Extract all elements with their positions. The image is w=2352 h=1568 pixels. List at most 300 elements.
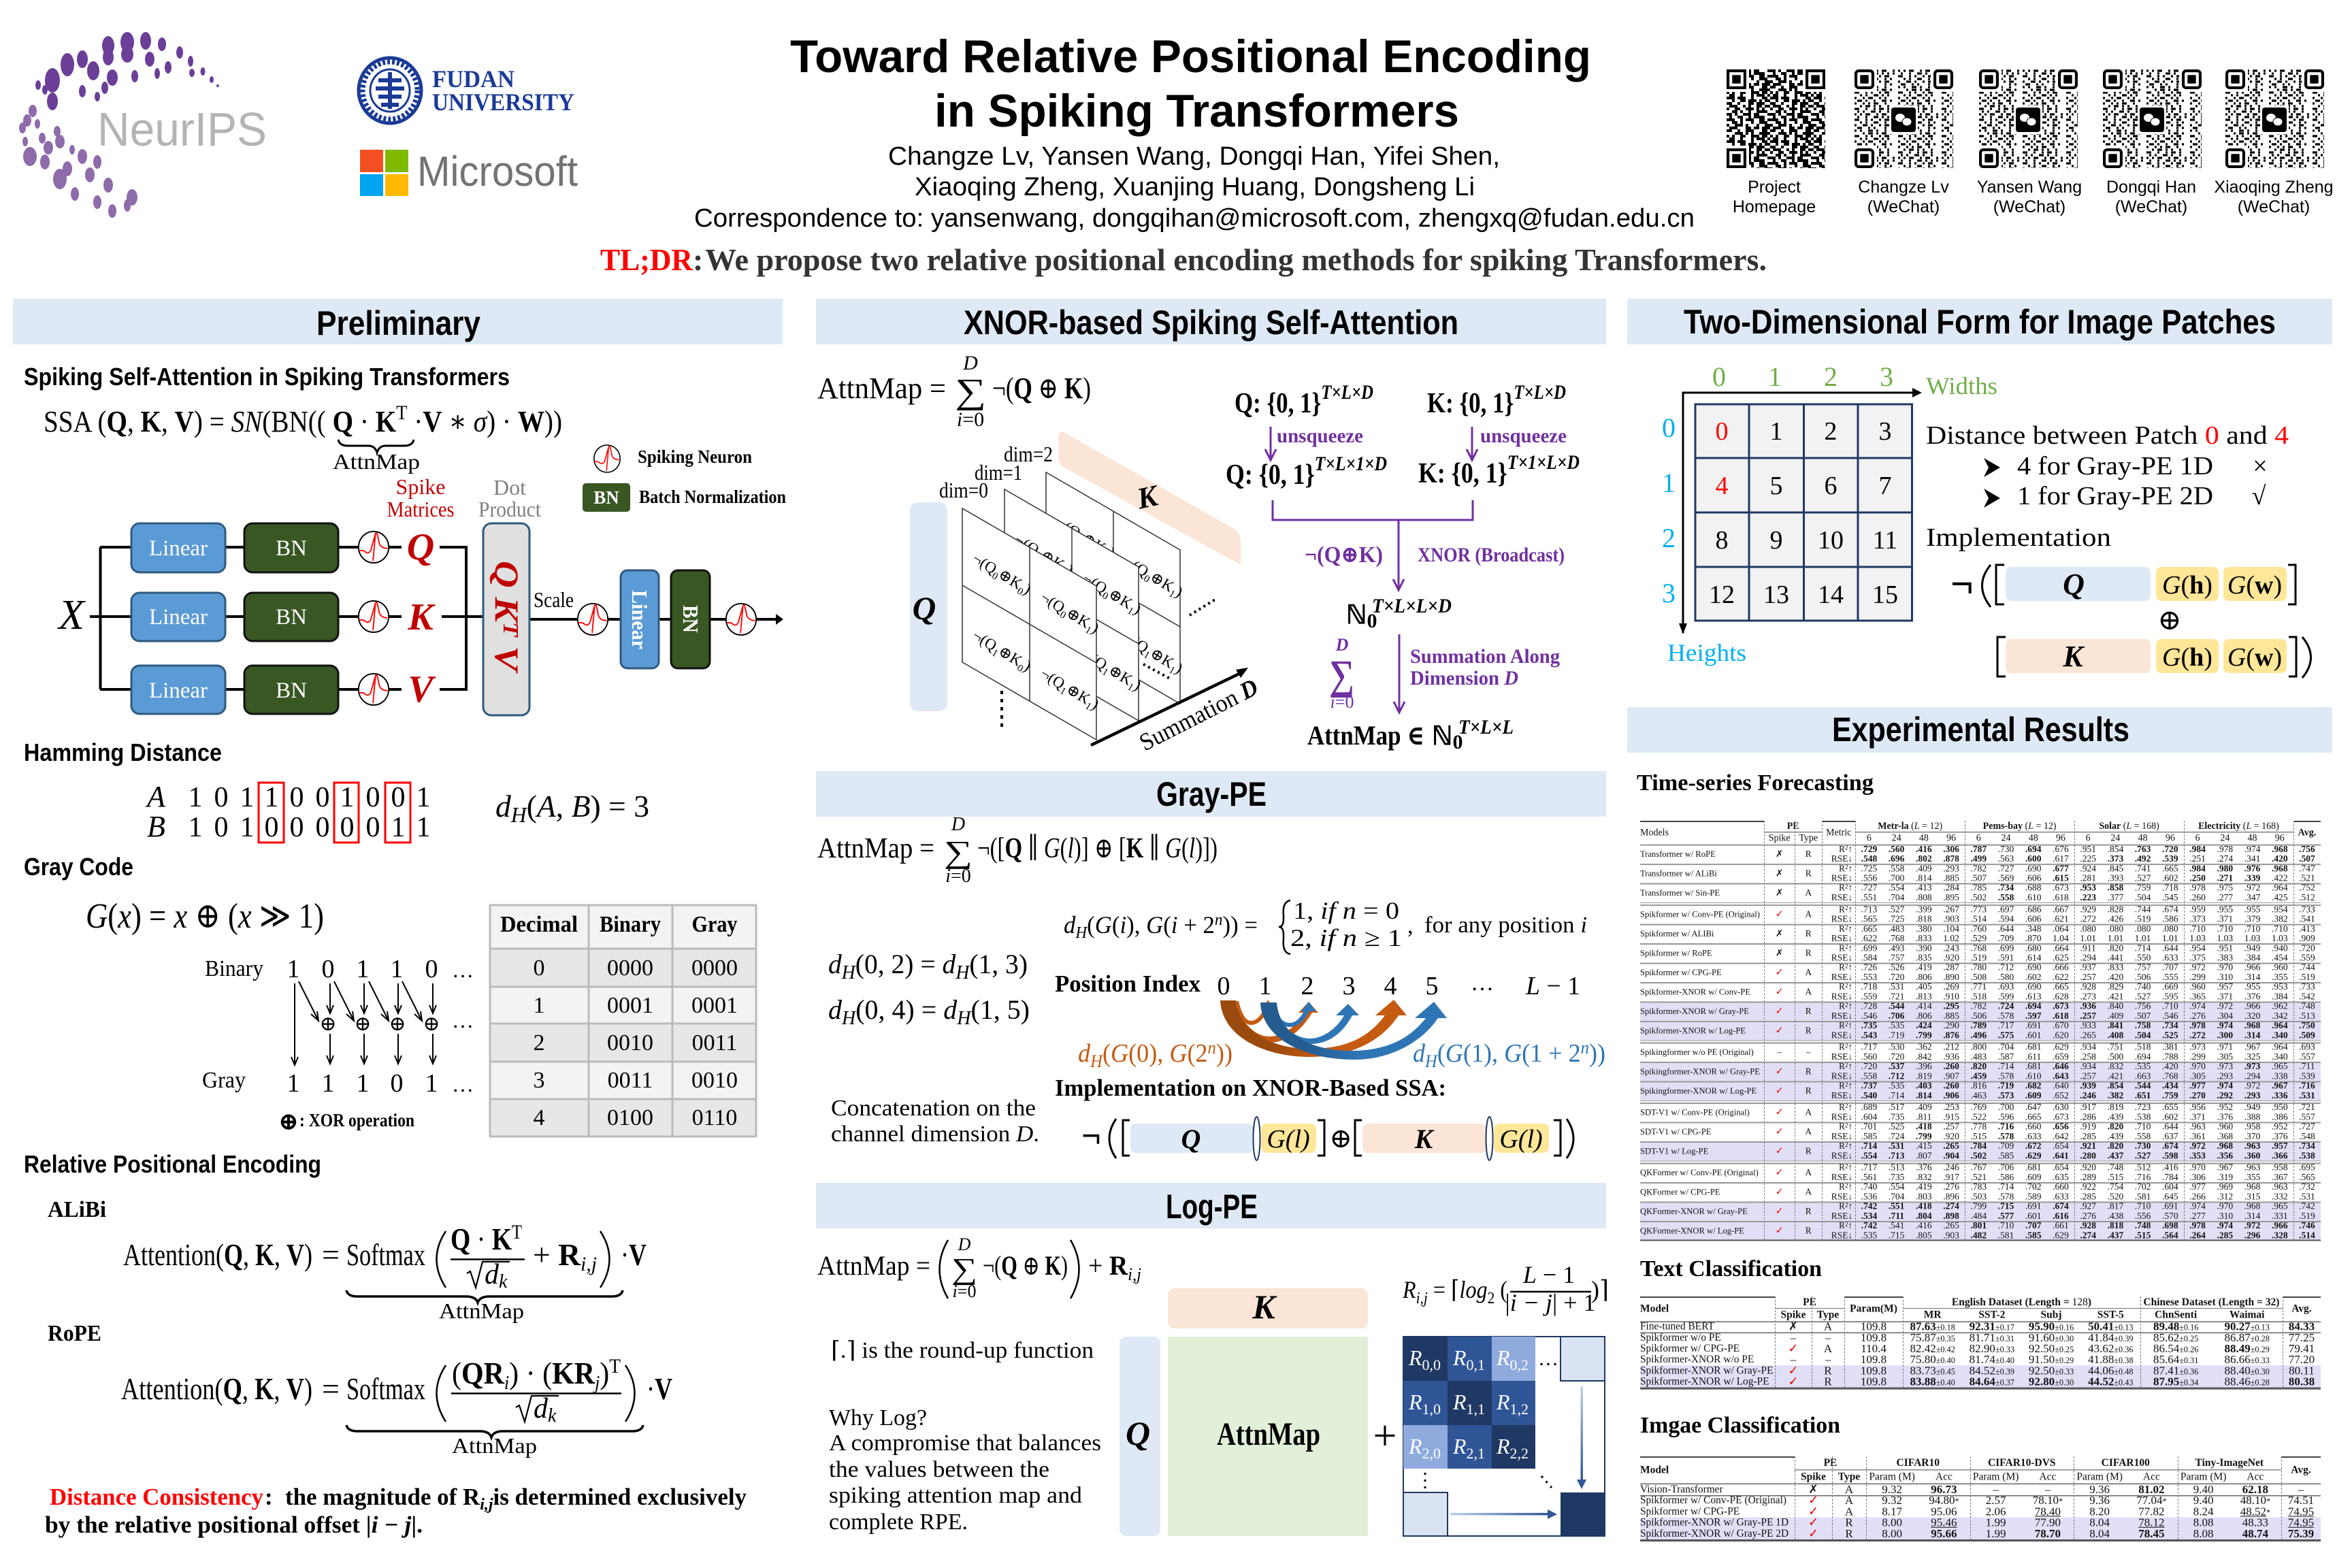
table: time-series forecasting results: .361 (2189, 1131, 2206, 1141)
table: time-series forecasting results: .735 (1889, 1111, 1904, 1122)
table: time-series forecasting results: ✓ (1776, 986, 1784, 997)
table: time-series forecasting results: .424 (1916, 1020, 1932, 1030)
formula: R i j definition: i,j (1416, 1290, 1428, 1307)
table: time-series forecasting results: R2↑ (1839, 962, 1852, 973)
table: time-series forecasting results: .710 (2189, 924, 2206, 934)
table: time-series forecasting results: .519 (2299, 972, 2315, 982)
table: time-series forecasting results: R (1806, 1025, 1812, 1035)
Hamming distance example: 1 (240, 812, 255, 843)
table: time-series forecasting results: .304 (2217, 1011, 2233, 1021)
formula: Hamming distance of Gray code: G(i), G(i + 2 (1095, 911, 1216, 938)
table: time-series forecasting results: .420 (2162, 1061, 2178, 1071)
text: patch distance: √ (2252, 482, 2266, 510)
table: time-series forecasting results: .697 (1998, 904, 2014, 914)
table: time-series forecasting results: .299 (2189, 1051, 2206, 1062)
table: time-series forecasting results: R2↑ (1839, 943, 1852, 953)
table: time-series forecasting results: R (1806, 1066, 1812, 1076)
table: image classification results: ✓ (1808, 1504, 1818, 1519)
formula: ALiBi attention: k (499, 1271, 508, 1292)
table: time-series forecasting results: .531 (2299, 1191, 2315, 1202)
diagram: position index arcs: 0 (1217, 972, 1230, 1000)
diagram: position index arcs: L − 1 (1525, 972, 1580, 1000)
table: time-series forecasting results: .513 (2299, 1011, 2315, 1021)
table: time-series forecasting results: .680 (2025, 943, 2042, 953)
formula: Hamming distance of Gray code: 2, if n ≥ 1 (1290, 924, 1402, 951)
formula: RoPE attention: j (593, 1373, 600, 1394)
table: time-series forecasting results: .878 (1943, 853, 1959, 864)
diagram: binary to Gray conversion: ⊕ (423, 1013, 440, 1035)
front sheet dim=0: ⊕K (1064, 681, 1094, 708)
table: image classification results: 9.36 (2089, 1483, 2110, 1496)
matrix: relative positional encoding R: R (1409, 1345, 1422, 1370)
table: time-series forecasting results: .911 (2080, 943, 2096, 953)
table: time-series forecasting results: .371 (2217, 913, 2233, 924)
Hamming distance example: B (147, 810, 165, 843)
table: time-series forecasting results: .535 (1889, 1020, 1904, 1030)
table: text classification results: 92.50±0.33 (2029, 1364, 2074, 1377)
table: time-series forecasting results: ✓ (1776, 1206, 1784, 1217)
QR codes with captions: (WeChat) (1867, 197, 1940, 216)
back sheet dim=2: ⊕K (1147, 568, 1177, 595)
table: time-series forecasting results: .515 (1970, 1131, 1987, 1141)
table: time-series forecasting results: .966 (2244, 1000, 2260, 1011)
table: decimal binary gray: 0110 (692, 1105, 737, 1130)
table: time-series forecasting results: .314 (2244, 1030, 2260, 1040)
table: time-series forecasting results: .512 (2135, 1162, 2151, 1173)
diagram: spiking self-attention block: BN (276, 536, 307, 561)
table: time-series forecasting results: .972 (2244, 1080, 2260, 1091)
diagram: Log-PE attention map: + (1373, 1413, 1396, 1459)
table: time-series forecasting results: R2↑ (1839, 1042, 1852, 1052)
diagram: binary to Gray conversion: 1 (287, 955, 299, 983)
flow: XNOR computation steps: Summation Along (1410, 645, 1560, 668)
matrix: relative positional encoding R: R (1453, 1434, 1467, 1458)
table: text classification results: Subj (2041, 1309, 2062, 1320)
back sheet dim=2: 1 (1073, 611, 1083, 623)
table: time-series forecasting results: .601 (2025, 1211, 2042, 1221)
table: time-series forecasting results: Avg. (2298, 828, 2316, 838)
table: time-series forecasting results: .264 (2189, 1230, 2206, 1240)
table: text classification results: 41.84±0.39 (2088, 1331, 2133, 1344)
table: time-series forecasting results: .727 (1861, 883, 1877, 893)
diagram: spiking self-attention block: BN (679, 605, 703, 633)
diagram: spiking self-attention block: BN (276, 679, 307, 703)
table: time-series forecasting results: .348 (2025, 924, 2042, 934)
table: time-series forecasting results: .280 (2080, 1150, 2096, 1160)
formula: ALiBi attention: = (322, 1237, 340, 1272)
table: time-series forecasting results: .937 (2080, 962, 2096, 973)
table: time-series forecasting results: .964 (2272, 1020, 2288, 1030)
diagram: patch grid with width and height axes: 10 (1818, 526, 1844, 555)
table: time-series forecasting results: .306 (2189, 1172, 2206, 1182)
table: time-series forecasting results: .968 (2244, 1020, 2260, 1030)
table: time-series forecasting results: .751 (2108, 1042, 2123, 1052)
table: time-series forecasting results: .967 (2217, 1162, 2233, 1173)
table: text classification results: Spikformer-XNOR w/o PE (1640, 1354, 1754, 1365)
table: time-series forecasting results: ✓ (1776, 1107, 1784, 1117)
table: time-series forecasting results: .870 (2025, 933, 2042, 943)
table: time-series forecasting results: .500 (2108, 1051, 2123, 1062)
flow: XNOR computation steps (1226, 381, 1580, 753)
Hamming distance example: 1 (416, 782, 430, 813)
diagram: 3D XNOR broadcast sheets: K (1133, 478, 1162, 516)
Hamming distance example: 1 (340, 782, 354, 813)
middle sheet dim=1: ) (1063, 638, 1076, 656)
table: time-series forecasting results: .763 (2135, 844, 2151, 854)
table: time-series forecasting results: .409 (1916, 1102, 1932, 1112)
table: time-series forecasting results: .955 (2244, 981, 2260, 992)
subheading: Image Classification: Imgae Classification (1640, 1413, 1840, 1438)
table: time-series forecasting results: .903 (1943, 913, 1959, 924)
table: text classification results: 77.20 (2289, 1353, 2315, 1366)
table: time-series forecasting results: .720 (2299, 943, 2315, 953)
table: time-series forecasting results: .934 (2080, 1061, 2096, 1071)
table: time-series forecasting results: .702 (2025, 1181, 2042, 1192)
table: time-series forecasting results: .578 (1998, 1071, 2014, 1081)
table: time-series forecasting results: .820 (2108, 1141, 2123, 1151)
table: time-series forecasting results: .709 (1998, 933, 2014, 943)
table: text classification results: – (1825, 1331, 1831, 1344)
table: time-series forecasting results: .698 (2162, 1220, 2178, 1230)
table: time-series forecasting results: .517 (1889, 1102, 1904, 1112)
diagram: 3D XNOR broadcast sheets: dim=1 (975, 460, 1022, 485)
table: time-series forecasting results: .966 (2244, 962, 2260, 973)
table: time-series forecasting results: .260 (1943, 1080, 1959, 1091)
table: time-series forecasting results: .720 (1889, 972, 1904, 982)
table: text classification results: 43.62±0.36 (2088, 1342, 2133, 1355)
table: time-series forecasting results: .740 (2135, 981, 2151, 992)
table: time-series forecasting results: .270 (2189, 1090, 2206, 1100)
back sheet dim=2: ⊕K (1079, 606, 1109, 634)
formula: RoPE attention: i (504, 1373, 509, 1394)
heading: Experimental Results (1627, 707, 2332, 753)
label: blue distance: d (1413, 1039, 1426, 1068)
table: image classification results: ✓ (1808, 1493, 1818, 1507)
table: time-series forecasting results: PE (1787, 821, 1799, 832)
authors and correspondence: Xiaoqing Zheng, Xuanjing Huang, Dongsheng Li (915, 173, 1475, 201)
table: time-series forecasting results: .936 (2080, 1000, 2096, 1011)
table: time-series forecasting results: .959 (2189, 904, 2206, 914)
table: decimal binary gray: 0100 (607, 1105, 653, 1130)
table: text classification results: ✓ (1788, 1341, 1798, 1356)
table: time-series forecasting results: .958 (2272, 1162, 2288, 1173)
table: time-series forecasting results: .896 (1943, 1191, 1959, 1202)
table: time-series forecasting results: .294 (2080, 952, 2096, 963)
subheading: Gray Code: Gray Code (24, 853, 133, 881)
matrix: relative positional encoding R: 1,1 (1467, 1401, 1485, 1418)
formula: RoPE attention: Softmax (346, 1371, 425, 1406)
Hamming distance example: 0 (214, 812, 229, 843)
table: time-series forecasting results: .903 (1943, 1230, 1959, 1240)
diagram: binary to Gray conversion: ⊕ (278, 1108, 299, 1135)
table: time-series forecasting results: .342 (2272, 1011, 2288, 1021)
diagram: binary to Gray conversion: 1 (357, 955, 369, 983)
table: time-series forecasting results: .654 (2053, 1162, 2069, 1173)
table: time-series forecasting results: Pems-bay (L = 12) (1983, 821, 2057, 832)
table: text classification results: 92.31±0.17 (1970, 1320, 2014, 1333)
table: time-series forecasting results: .246 (2080, 1090, 2096, 1100)
Hamming distance example: 1 (416, 812, 430, 843)
table: time-series forecasting results: R2↑ (1839, 1200, 1852, 1211)
table: time-series forecasting results: .727 (1998, 863, 2014, 873)
formula: RoPE attention: ) (600, 1356, 609, 1390)
back sheet dim=2: ) (1173, 659, 1186, 677)
diagram: binary to Gray conversion: … (452, 958, 474, 982)
table: time-series forecasting results: .960 (2272, 962, 2288, 973)
table: time-series forecasting results: .600 (2025, 853, 2042, 864)
table: time-series forecasting results: .933 (2080, 1020, 2096, 1030)
table: time-series forecasting results: .858 (2108, 883, 2123, 893)
table: time-series forecasting results: .720 (2162, 844, 2178, 854)
table: time-series forecasting results: .714 (1998, 1181, 2014, 1192)
table: decimal binary gray: Decimal (500, 912, 578, 937)
table: time-series forecasting results: Models (1640, 828, 1669, 838)
table: time-series forecasting results: .771 (1970, 981, 1987, 992)
table: time-series forecasting results: QKFormer-XNOR w/ Log-PE (1640, 1226, 1744, 1235)
table: time-series forecasting results: .816 (1970, 1080, 1987, 1091)
table: time-series forecasting results: .527 (2135, 1150, 2151, 1160)
diagram: patch grid with width and height axes: 15 (1872, 581, 1898, 609)
table: time-series forecasting results: .541 (1889, 1220, 1904, 1230)
table: text classification results: Spikformer-XNOR w/ Log-PE (1640, 1375, 1769, 1388)
middle sheet dim=1 (1004, 489, 1144, 721)
Hamming distance example: 1 (188, 782, 203, 813)
table: time-series forecasting results: .710 (2244, 924, 2260, 934)
Hamming distance example: 1 (264, 782, 279, 813)
table: time-series forecasting results: .565 (1861, 913, 1877, 924)
table: decimal binary gray: 0000 (691, 956, 738, 981)
table: image classification results: 78.70 (2035, 1527, 2061, 1540)
table: time-series forecasting results: A (1805, 1107, 1812, 1117)
Hamming distance example: 1 (240, 782, 255, 813)
table: time-series forecasting results: .835 (1916, 952, 1932, 963)
table: time-series forecasting results: .585 (2025, 1230, 2042, 1240)
formula: 2D Gray-PE implementation: G(w) (2227, 643, 2282, 672)
table: time-series forecasting results: .646 (2053, 1061, 2069, 1071)
table: time-series forecasting results: .535 (2135, 1061, 2151, 1071)
diagram: Log-PE attention map (1120, 1288, 1396, 1536)
formula: RoPE attention: (QR (452, 1356, 508, 1390)
table: time-series forecasting results: .587 (1998, 1051, 2014, 1062)
formula: XNOR AttnMap: AttnMap = (817, 372, 946, 405)
diagram: spiking self-attention block: Linear (627, 590, 652, 649)
table: time-series forecasting results: .595 (2162, 991, 2178, 1002)
table: image classification results: 74.95 (2288, 1505, 2314, 1518)
table: time-series forecasting results: .531 (1889, 981, 1904, 992)
table: time-series forecasting results: .799 (1970, 1200, 1987, 1211)
logo: NeurIPS (19, 32, 267, 218)
matrix: relative positional encoding R: R (1497, 1345, 1510, 1370)
table: decimal binary gray: 3 (534, 1068, 544, 1093)
authors and correspondence (694, 142, 1695, 233)
table: image classification results: 94.80* (1929, 1494, 1959, 1507)
table: image classification results: 8.08 (2193, 1527, 2214, 1540)
table: time-series forecasting results: .819 (1916, 1071, 1932, 1081)
table: time-series forecasting results: .645 (2162, 1191, 2178, 1202)
table: image classification results: Model (1640, 1464, 1669, 1475)
middle sheet dim=1: ) (1063, 561, 1076, 579)
table: time-series forecasting results: .778 (1970, 1122, 1987, 1132)
table: time-series forecasting results: Spikingformer-XNOR w/ Gray-PE (1640, 1066, 1760, 1076)
table: text classification results: Model (1640, 1303, 1669, 1314)
table: image classification results: R (1845, 1516, 1853, 1529)
table: time-series forecasting results: .366 (2272, 1150, 2288, 1160)
table: time-series forecasting results: .803 (1916, 1191, 1932, 1202)
table: time-series forecasting results: .659 (2053, 1051, 2069, 1062)
table: image classification results: CIFAR100 (2102, 1457, 2150, 1469)
label: blue distance: )) (1589, 1039, 1605, 1068)
table: time-series forecasting results: .735 (1861, 1020, 1877, 1030)
matrix: relative positional encoding R: 1,2 (1510, 1401, 1529, 1418)
QR codes with captions: Project (1748, 178, 1801, 197)
table: time-series forecasting results: .699 (1861, 943, 1877, 953)
table: text classification results: 87.95±0.34 (2153, 1375, 2198, 1388)
table: time-series forecasting results: .597 (2025, 1011, 2042, 1021)
formula: R i j definition: L − 1 (1522, 1261, 1575, 1288)
table: time-series forecasting results: .521 (2299, 872, 2315, 883)
table: image classification results: ✓ (1808, 1515, 1818, 1530)
matrix: relative positional encoding R: R (1409, 1434, 1422, 1458)
table: time-series forecasting results: .693 (1998, 981, 2014, 992)
table: image classification results: 77.82 (2138, 1505, 2165, 1518)
table: time-series forecasting results: .974 (2189, 1000, 2206, 1011)
table: time-series forecasting results: RSE↓ (1831, 1172, 1852, 1182)
table: time-series forecasting results: .558 (1889, 863, 1904, 873)
table: time-series forecasting results: .418 (1916, 1122, 1932, 1132)
diagram: patch grid with width and height axes: 8 (1715, 526, 1729, 555)
table: time-series forecasting results: .274 (2080, 1230, 2096, 1240)
table: time-series forecasting results: .594 (1998, 913, 2014, 924)
table: time-series forecasting results: .710 (1998, 1220, 2014, 1230)
table: time-series forecasting results: .788 (2162, 1051, 2178, 1062)
table: time-series forecasting results: .819 (2108, 1102, 2123, 1112)
table: text classification results: A (1824, 1342, 1832, 1355)
formula: Log-PE AttnMap: ¬(Q ⊕ K) (983, 1250, 1068, 1281)
table: time-series forecasting results: .104 (1943, 924, 1959, 934)
table: time-series forecasting results: .551 (1861, 892, 1877, 902)
table: time-series forecasting results: .508 (1970, 972, 1987, 982)
equations: Hamming equalities: (1, 5) (970, 994, 1030, 1025)
table: text classification results: ✓ (1788, 1363, 1798, 1377)
table: time-series forecasting results: RSE↓ (1831, 991, 1852, 1002)
table: time-series forecasting results: .669 (2162, 981, 2178, 992)
table: time-series forecasting results: ✓ (1776, 1186, 1784, 1197)
diagram: binary to Gray conversion: 1 (287, 1069, 299, 1098)
table: time-series forecasting results: .734 (1998, 883, 2014, 893)
table: time-series forecasting results: .509 (2299, 1030, 2315, 1040)
table: time-series forecasting results: .702 (2135, 1181, 2151, 1192)
formula: R i j definition: = ⌈ (1428, 1276, 1460, 1303)
table: time-series forecasting results: .266 (2189, 1191, 2206, 1202)
table: time-series forecasting results: .257 (2080, 1071, 2096, 1081)
table: time-series forecasting results: RSE↓ (1831, 1071, 1852, 1081)
matrix: relative positional encoding R: 2,1 (1467, 1445, 1485, 1462)
table: time-series forecasting results: .904 (1943, 1150, 1959, 1160)
formula: Gray-PE implementation: G(l) (1499, 1125, 1543, 1154)
table: time-series forecasting results: .968 (2244, 1200, 2260, 1211)
table: time-series forecasting results: .439 (2108, 1131, 2123, 1141)
table: time-series forecasting results: .666 (2053, 962, 2069, 973)
table: image classification results: ✗ (1808, 1483, 1818, 1497)
legend: spiking neuron and batch normalization (583, 445, 786, 512)
equations: Hamming equalities: H (841, 962, 857, 983)
table: time-series forecasting results: .922 (2080, 1181, 2096, 1192)
legend: spiking neuron and batch normalization: Batch Normalization (639, 487, 786, 507)
table: time-series forecasting results: .707 (2025, 1220, 2042, 1230)
table: time-series forecasting results: .928 (2080, 1220, 2096, 1230)
table: time-series forecasting results: 24 (2001, 833, 2010, 844)
table: time-series forecasting results: .347 (2244, 892, 2260, 902)
table: time-series forecasting results: .757 (2135, 962, 2151, 973)
table: time-series forecasting results: .725 (1889, 913, 1904, 924)
formula: Log-PE AttnMap: i,j (1128, 1264, 1141, 1284)
table: time-series forecasting results: .276 (1943, 1181, 1959, 1192)
table: time-series forecasting results: .260 (2189, 892, 2206, 902)
flow: XNOR computation steps: K: {0, 1} (1427, 388, 1531, 419)
table: time-series forecasting results: R2↑ (1839, 1080, 1852, 1091)
table: time-series forecasting results: .876 (1943, 1030, 1959, 1040)
table: time-series forecasting results: .654 (2053, 1141, 2069, 1151)
table: time-series forecasting results: .964 (2272, 1042, 2288, 1052)
table: decimal binary gray: 0010 (691, 1068, 738, 1093)
table: image classification results: 78.10* (2033, 1494, 2063, 1507)
table: time-series forecasting results: .519 (2299, 1211, 2315, 1221)
table: image classification results: 9.40 (2193, 1494, 2214, 1507)
table: time-series forecasting results: .895 (1943, 892, 1959, 902)
table: time-series forecasting results: .413 (2299, 924, 2315, 934)
table: time-series forecasting results: .541 (2299, 913, 2315, 924)
table: time-series forecasting results: .328 (2272, 1230, 2288, 1240)
table: time-series forecasting results: Spikingformer w/o PE (Original) (1640, 1047, 1754, 1057)
flow: XNOR computation steps: unsqueeze (1277, 425, 1363, 447)
table: time-series forecasting results: .539 (2162, 853, 2178, 864)
formula: Hamming distance of Gray code: ( (1087, 911, 1095, 938)
QR codes with captions: (WeChat) (2115, 197, 2187, 216)
front sheet dim=0: ⊕K (996, 642, 1026, 670)
table: time-series forecasting results: .609 (2025, 1172, 2042, 1182)
table: time-series forecasting results: 1.01 (2162, 933, 2178, 943)
table: time-series forecasting results: .963 (2244, 1162, 2260, 1173)
table: time-series forecasting results: .691 (2025, 1020, 2042, 1030)
table: time-series forecasting results: A (1805, 1186, 1812, 1196)
Hamming distance example: H (510, 802, 528, 827)
heading: Log-PE (816, 1183, 1606, 1228)
table: time-series forecasting results: .269 (1943, 981, 1959, 992)
table: time-series forecasting results: .257 (2080, 972, 2096, 982)
table: time-series forecasting results: 1.03 (2189, 933, 2206, 943)
table: time-series forecasting results: .519 (2135, 913, 2151, 924)
table: text classification results: 95.90±0.16 (2029, 1320, 2074, 1333)
text: patch distance: Implementation (1926, 523, 2111, 552)
table: text classification results: 75.87±0.35 (1910, 1331, 1955, 1344)
table: time-series forecasting results: .694 (2135, 1051, 2151, 1062)
formula: R i j definition: |i − j| + 1 (1505, 1289, 1596, 1316)
table: time-series forecasting results: 48 (2248, 833, 2257, 844)
table: time-series forecasting results: .910 (1943, 991, 1959, 1002)
table: time-series forecasting results: .710 (2135, 1122, 2151, 1132)
formula: Gray-PE AttnMap: ∑ (944, 834, 973, 869)
table: time-series forecasting results: .331 (2272, 1211, 2288, 1221)
table: time-series forecasting results: RSE↓ (1831, 913, 1852, 924)
table: time-series forecasting results: .984 (2189, 844, 2206, 854)
table: time-series forecasting results: SDT-V1 w/ CPG-PE (1640, 1127, 1712, 1137)
table: time-series forecasting results: .714 (1998, 1061, 2014, 1071)
table: time-series forecasting results: RSE↓ (1831, 952, 1852, 963)
label: ALiBi: ALiBi (48, 1197, 106, 1222)
diagram: binary to Gray conversion: … (452, 1008, 474, 1032)
formula: 2D Gray-PE implementation: ⊕ (2157, 605, 2182, 636)
table: decimal binary gray: 0011 (608, 1068, 653, 1093)
